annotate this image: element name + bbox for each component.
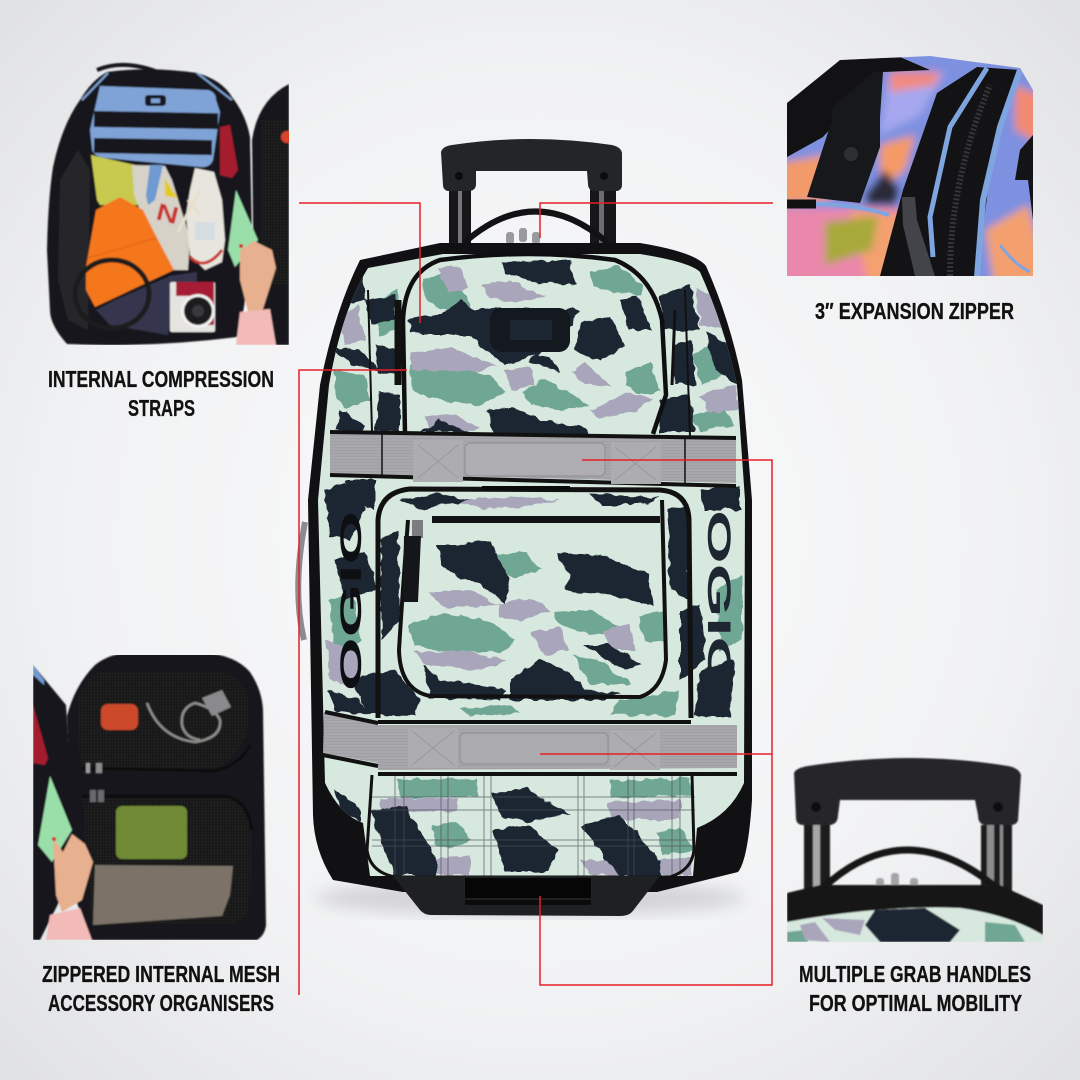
line: compression straps [299, 203, 420, 323]
expansion zip band [880, 67, 1020, 277]
zip pullers [506, 228, 540, 244]
line: upper handle [540, 460, 772, 985]
colourful fabric [787, 56, 1033, 276]
upper compression strap [330, 432, 736, 486]
mesh organiser shell [67, 653, 266, 940]
case top [787, 885, 1043, 942]
open case shell [47, 69, 252, 345]
photo: zippered mesh organisers [33, 653, 266, 940]
plaid stitching [372, 776, 695, 876]
right strap [1015, 135, 1033, 220]
pocket zipper [403, 488, 660, 602]
lilac patches [325, 266, 740, 875]
open lid panel [33, 665, 75, 940]
bottom mesh pocket [82, 796, 252, 925]
sneaker logo letter: N [153, 199, 181, 230]
lower compression strap [323, 712, 737, 774]
carry arc [823, 850, 997, 888]
front logo patch [490, 308, 570, 352]
red earbud case [101, 704, 138, 730]
handle grip [794, 758, 1021, 825]
camo fabric [310, 250, 755, 880]
grey pouch [93, 865, 233, 925]
green patches [330, 266, 742, 855]
suitcase product [298, 139, 755, 916]
fabric strap [807, 72, 883, 203]
photo: grab handles [787, 758, 1043, 942]
side grab handle [298, 522, 305, 640]
navy clothing [96, 272, 197, 335]
hand and sleeve [46, 834, 93, 940]
camera [170, 282, 215, 332]
photo: internal compression straps [47, 65, 293, 345]
telescopic handle [441, 139, 622, 247]
zip puller [902, 197, 935, 276]
plaid panel outline [367, 775, 694, 877]
red bottle [220, 125, 238, 178]
label: zippered mesh organisers: ACCESSORY ORGANISERS [48, 990, 274, 1016]
label: internal compression straps: INTERNAL COMPRESSION [48, 366, 274, 392]
label: internal compression straps: STRAPS [128, 395, 195, 421]
camo preview [787, 908, 1043, 942]
piping [816, 204, 889, 215]
right lid [252, 84, 289, 345]
line: expansion zipper [540, 203, 773, 238]
wheel base [393, 876, 660, 916]
photo: 3 inch expansion zipper [787, 56, 1033, 276]
cable and charger [147, 690, 231, 742]
mint notebook [228, 190, 258, 267]
label: expansion zipper: 3″ EXPANSION ZIPPER [815, 298, 1014, 324]
label: grab handles: FOR OPTIMAL MOBILITY [809, 990, 1022, 1016]
side logo right: OGIO [701, 510, 737, 690]
hand and sleeve [236, 241, 276, 345]
leader lines [299, 203, 773, 995]
carry handle arc [464, 212, 608, 243]
side logo left: OGIO [335, 511, 368, 691]
label: zippered mesh organisers: ZIPPERED INTERNAL MESH [42, 961, 280, 987]
sneakers [132, 165, 225, 270]
green pad [116, 806, 187, 859]
mint notebook [38, 776, 72, 862]
ground shadow [315, 880, 745, 916]
black handle top [787, 57, 930, 157]
navy patches [325, 260, 740, 876]
telescopic poles [804, 825, 1012, 895]
body shell [308, 243, 752, 892]
lower pocket frame [378, 489, 691, 718]
blue pouch [90, 86, 220, 167]
orange beanie [86, 197, 174, 307]
upper pocket zip lines [403, 254, 666, 434]
front pocket outline [399, 500, 666, 697]
top mesh pocket [78, 672, 250, 771]
line: mesh organisers [299, 370, 407, 995]
zip pulls [876, 873, 918, 892]
belt [75, 260, 149, 328]
yellow shirt [91, 155, 138, 205]
line: lower handle [540, 753, 772, 755]
